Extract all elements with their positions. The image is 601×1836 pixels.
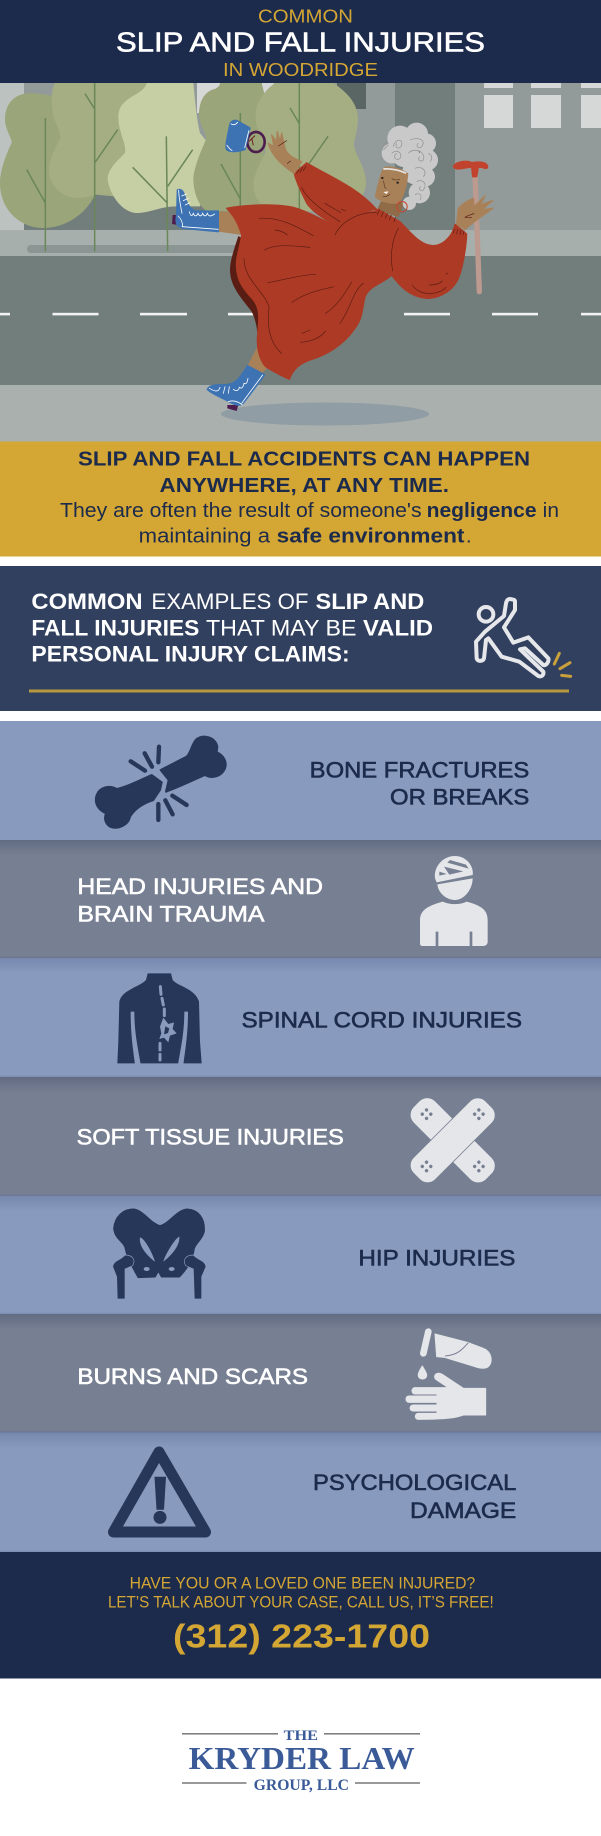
examples heading: FALL INJURIES: [31, 616, 199, 641]
intro heading: SLIP AND FALL ACCIDENTS CAN HAPPEN: [78, 449, 530, 471]
logo: the kryder law group: GROUP, LLC: [254, 1777, 349, 1794]
examples heading: PERSONAL INJURY CLAIMS:: [31, 642, 350, 667]
label: burns and scars: BURNS AND SCARS: [77, 1364, 308, 1389]
handbag: [226, 120, 265, 152]
trees: [0, 83, 366, 251]
label: soft tissue: SOFT TISSUE INJURIES: [77, 1125, 344, 1150]
icon: pelvis: [113, 1209, 206, 1299]
illustration: street scene with falling woman: [0, 83, 601, 442]
label: psychological damage: [313, 1470, 516, 1523]
examples heading: EXAMPLES OF: [151, 589, 308, 614]
label: bone fractures: OR BREAKS: [390, 785, 529, 810]
neck: [377, 202, 405, 217]
title: SLIP AND FALL INJURIES: [116, 27, 485, 58]
label: head injuries: [77, 874, 323, 927]
dress folds: [244, 141, 474, 353]
intro body text: They are often the result of someone's: [60, 500, 422, 522]
dress body: [227, 205, 467, 379]
intro body text: safe environment: [277, 526, 465, 548]
label: bone fractures: [310, 758, 529, 810]
icon: spine: [117, 973, 202, 1064]
panel: call to action: [0, 1552, 601, 1678]
intro body text: maintaining a: [139, 526, 271, 548]
panel: gold intro: [0, 442, 601, 556]
face: [375, 166, 408, 204]
intro heading: [78, 449, 530, 497]
panel: burns and scars: [0, 1314, 601, 1432]
hair: [382, 123, 438, 210]
call to action text: HAVE YOU OR A LOVED ONE BEEN INJURED?: [130, 1574, 475, 1592]
label: hip injuries: HIP INJURIES: [358, 1246, 516, 1271]
examples heading: COMMON: [31, 589, 143, 614]
left sleeve: [294, 163, 377, 227]
hand left: [268, 132, 302, 173]
panel: spinal cord: [0, 958, 601, 1077]
label: head injuries: HEAD INJURIES AND: [77, 874, 323, 899]
label: spinal cord: SPINAL CORD INJURIES: [242, 1008, 522, 1033]
panel: hip injuries: [0, 1196, 601, 1314]
label: psychological damage: DAMAGE: [410, 1498, 516, 1523]
intro body text: negligence: [427, 500, 537, 522]
intro body text: [60, 500, 559, 548]
panel: soft tissue: [0, 1077, 601, 1196]
legs: [218, 212, 269, 375]
intro heading: ANYWHERE, AT ANY TIME.: [160, 475, 449, 497]
examples heading: VALID: [363, 616, 433, 641]
icon: person slipping: [476, 599, 571, 676]
shoes: [172, 189, 264, 411]
header line: common: COMMON: [258, 6, 353, 27]
icon: broken bone: [96, 737, 226, 828]
logo: the kryder law group: THE: [284, 1728, 318, 1744]
label: bone fractures: BONE FRACTURES: [310, 758, 529, 783]
header band: [0, 0, 601, 83]
earring: [397, 201, 407, 212]
icon: warning triangle: [114, 1452, 206, 1532]
logo: the kryder law group: KRYDER LAW: [189, 1740, 415, 1776]
intro body text: .: [466, 526, 472, 548]
label: psychological damage: PSYCHOLOGICAL: [313, 1470, 516, 1495]
panel: bone fractures: [0, 721, 601, 840]
icon: bandaged head: [420, 856, 488, 946]
hand right: [457, 196, 493, 229]
cane: [453, 161, 488, 292]
panel: psychological damage: [0, 1432, 601, 1552]
icon: chemical on hand: [406, 1332, 491, 1419]
panel: head injuries: [0, 840, 601, 958]
label: head injuries: BRAIN TRAUMA: [77, 902, 265, 927]
facial features: [381, 177, 400, 197]
icon: crossed bandages: [406, 1093, 500, 1187]
examples heading: SLIP AND: [316, 589, 424, 614]
intro body text: in: [543, 500, 559, 522]
examples heading: [31, 589, 433, 667]
call to action text: [108, 1574, 494, 1611]
panel: common examples: [0, 566, 601, 711]
call to action text: LET’S TALK ABOUT YOUR CASE, CALL US, IT’S FREE!: [108, 1593, 494, 1611]
logo: the kryder law group: [182, 1728, 420, 1794]
dress underlayer: [230, 236, 270, 347]
header line: location: IN WOODRIDGE: [223, 59, 378, 80]
phone number: (312) 223-1700: [173, 1618, 430, 1655]
examples heading: THAT MAY BE: [206, 616, 356, 641]
falling woman: [172, 123, 493, 411]
